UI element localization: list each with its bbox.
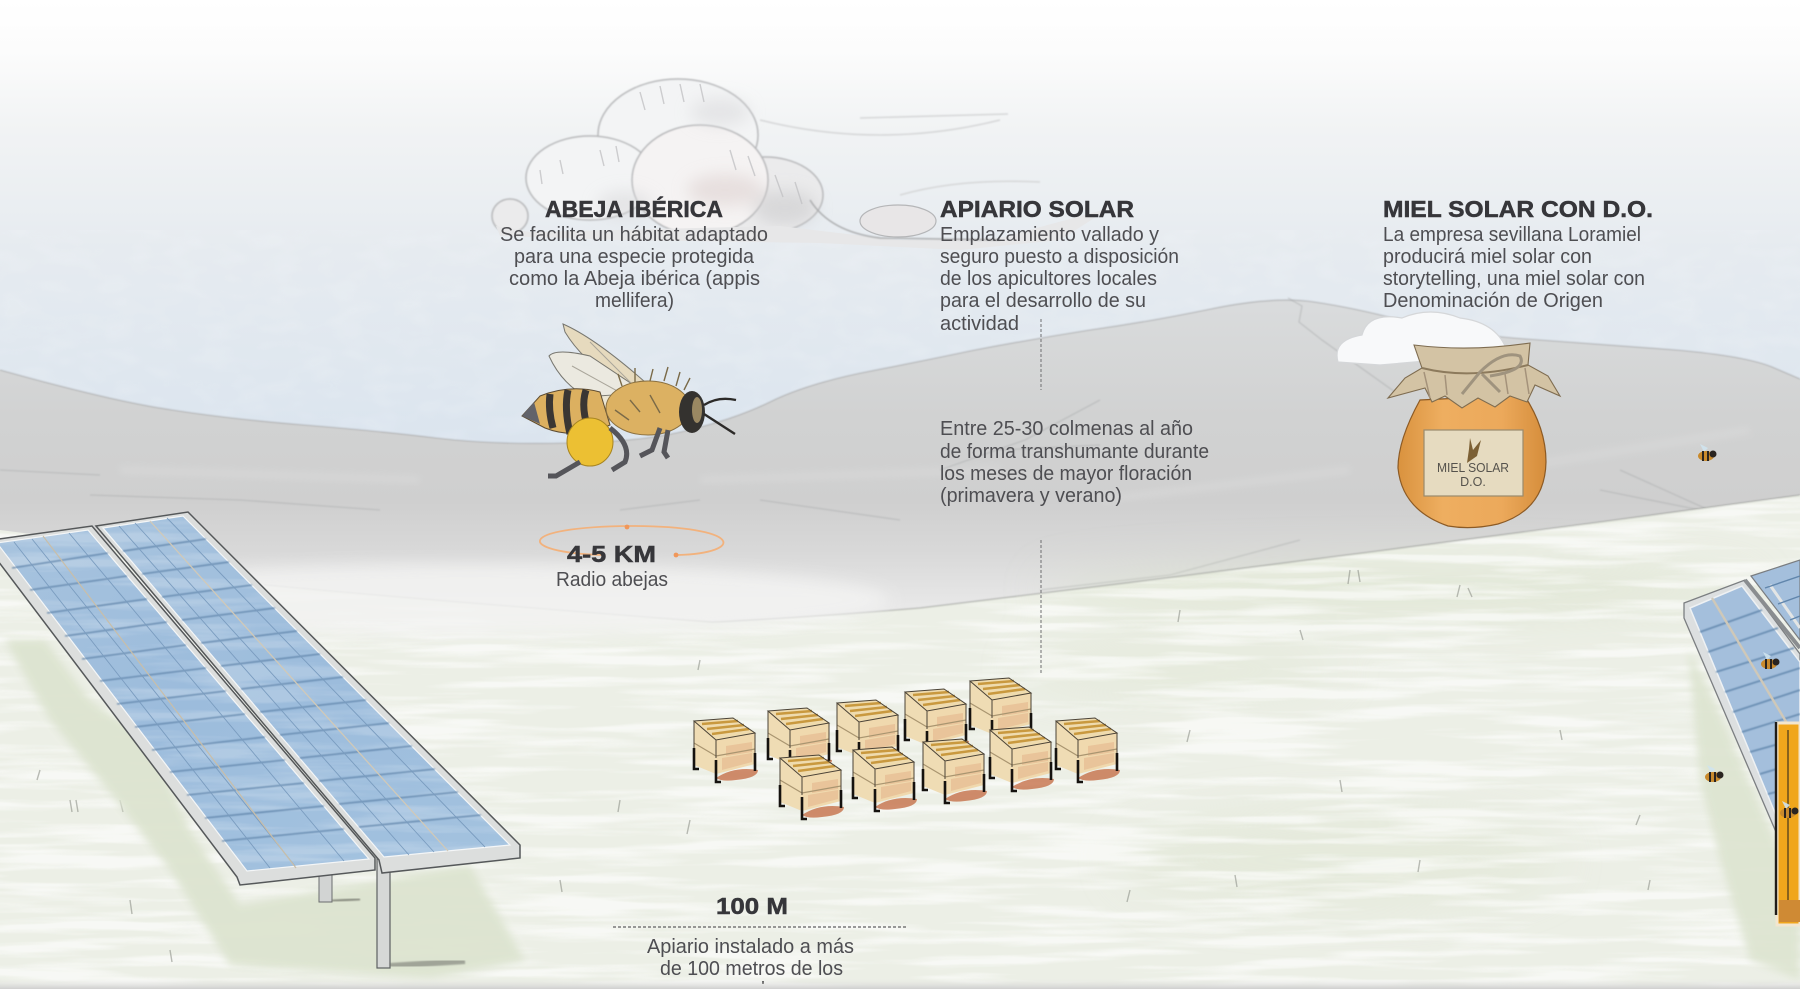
- cloud lobes: [492, 79, 823, 235]
- stat: apiary distance: [647, 893, 854, 980]
- text block: apiario solar: actividad: [940, 313, 1019, 335]
- bottom edge strip: [0, 979, 1800, 989]
- text block: abeja iberica: ABEJA IBÉRICA: [545, 195, 723, 222]
- jar bow: [1462, 355, 1521, 394]
- panel legs: [319, 858, 465, 968]
- cloud behind jar: [1337, 312, 1506, 365]
- left solar panels: [0, 512, 520, 968]
- text block: abeja iberica: para una especie protegida: [514, 246, 755, 268]
- meadow ground: [0, 495, 1800, 989]
- main bee illustration: [522, 324, 736, 476]
- 100 m distance line: [613, 926, 908, 928]
- text block: abeja iberica: como la Abeja ibérica (appis: [509, 268, 760, 290]
- jar label: MIEL SOLAR: [1437, 461, 1509, 475]
- text block: apiario solar: APIARIO SOLAR: [940, 196, 1134, 222]
- wind wisps: [760, 114, 1040, 195]
- stat: apiary distance: de 100 metros de los: [660, 958, 843, 980]
- text block: colmenas: [940, 418, 1209, 507]
- text block: apiario solar: para el desarrollo de su: [940, 290, 1146, 312]
- text block: miel solar: La empresa sevillana Loramiel: [1383, 224, 1641, 246]
- panel two cells: [103, 516, 510, 857]
- clipped text mark: [762, 981, 764, 984]
- sky grain band: [0, 230, 1800, 440]
- stat: apiary distance: 100 M: [716, 893, 788, 919]
- text block: colmenas: de forma transhumante durante: [940, 441, 1209, 463]
- text block: apiario solar: Emplazamiento vallado y: [940, 224, 1159, 246]
- apiary hives: [694, 678, 1120, 819]
- ground shade: right panels: [1688, 650, 1800, 980]
- text block: miel solar: Denominación de Origen: [1383, 290, 1603, 312]
- bee head: [679, 391, 705, 433]
- jar label: [1424, 430, 1523, 496]
- dashed connector upper: [1040, 319, 1042, 390]
- text block: abeja iberica: [500, 195, 768, 312]
- stat: apiary distance: Apiario instalado a más: [647, 936, 854, 958]
- bee thorax: [606, 381, 690, 435]
- text block: colmenas: los meses de mayor floración: [940, 463, 1192, 485]
- text block: abeja iberica: Se facilita un hábitat adaptado: [500, 224, 768, 246]
- bee legs: [548, 428, 668, 476]
- honey jar: [1388, 343, 1560, 528]
- panel one cells: [0, 530, 369, 871]
- mountain range: [0, 298, 1800, 640]
- large cloud: [492, 79, 1110, 250]
- text block: colmenas: (primavera y verano): [940, 485, 1122, 507]
- jar cloth cover: [1388, 343, 1560, 408]
- text block: miel solar: [1383, 196, 1653, 312]
- panel frame two: [96, 512, 520, 873]
- text block: apiario solar: [940, 196, 1179, 335]
- text block: colmenas: Entre 25-30 colmenas al año: [940, 418, 1193, 440]
- dashed connector lower: [1040, 540, 1042, 674]
- text block: abeja iberica: mellifera): [595, 290, 674, 312]
- ground shade: left panels: [5, 640, 525, 978]
- jar body: [1398, 395, 1546, 528]
- text block: apiario solar: de los apicultores locales: [940, 268, 1157, 290]
- text block: miel solar: MIEL SOLAR CON D.O.: [1383, 196, 1653, 222]
- small bees: [1698, 444, 1798, 818]
- bee wings: [549, 324, 650, 420]
- orange flight radius: [540, 525, 723, 557]
- cloud base: [496, 208, 1110, 250]
- panel frame one: [0, 526, 375, 885]
- bee abdomen: [522, 389, 610, 433]
- text block: miel solar: storytelling, una miel solar con: [1383, 268, 1645, 290]
- hill fade over ground: [50, 564, 890, 636]
- cloud hatching: [540, 84, 802, 204]
- right solar panels: [1684, 560, 1800, 860]
- stat: bee radius: Radio abejas: [556, 569, 668, 591]
- orange door: [1776, 722, 1800, 925]
- stat: bee radius: 4-5 KM: [567, 541, 656, 567]
- text block: apiario solar: seguro puesto a disposición: [940, 246, 1179, 268]
- jar label: D.O.: [1460, 475, 1486, 489]
- cloud shading: [597, 98, 817, 226]
- bee pollen basket: [567, 418, 613, 466]
- text block: miel solar: producirá miel solar con: [1383, 246, 1592, 268]
- stat: bee radius: [556, 541, 668, 591]
- sky background: [0, 0, 1800, 500]
